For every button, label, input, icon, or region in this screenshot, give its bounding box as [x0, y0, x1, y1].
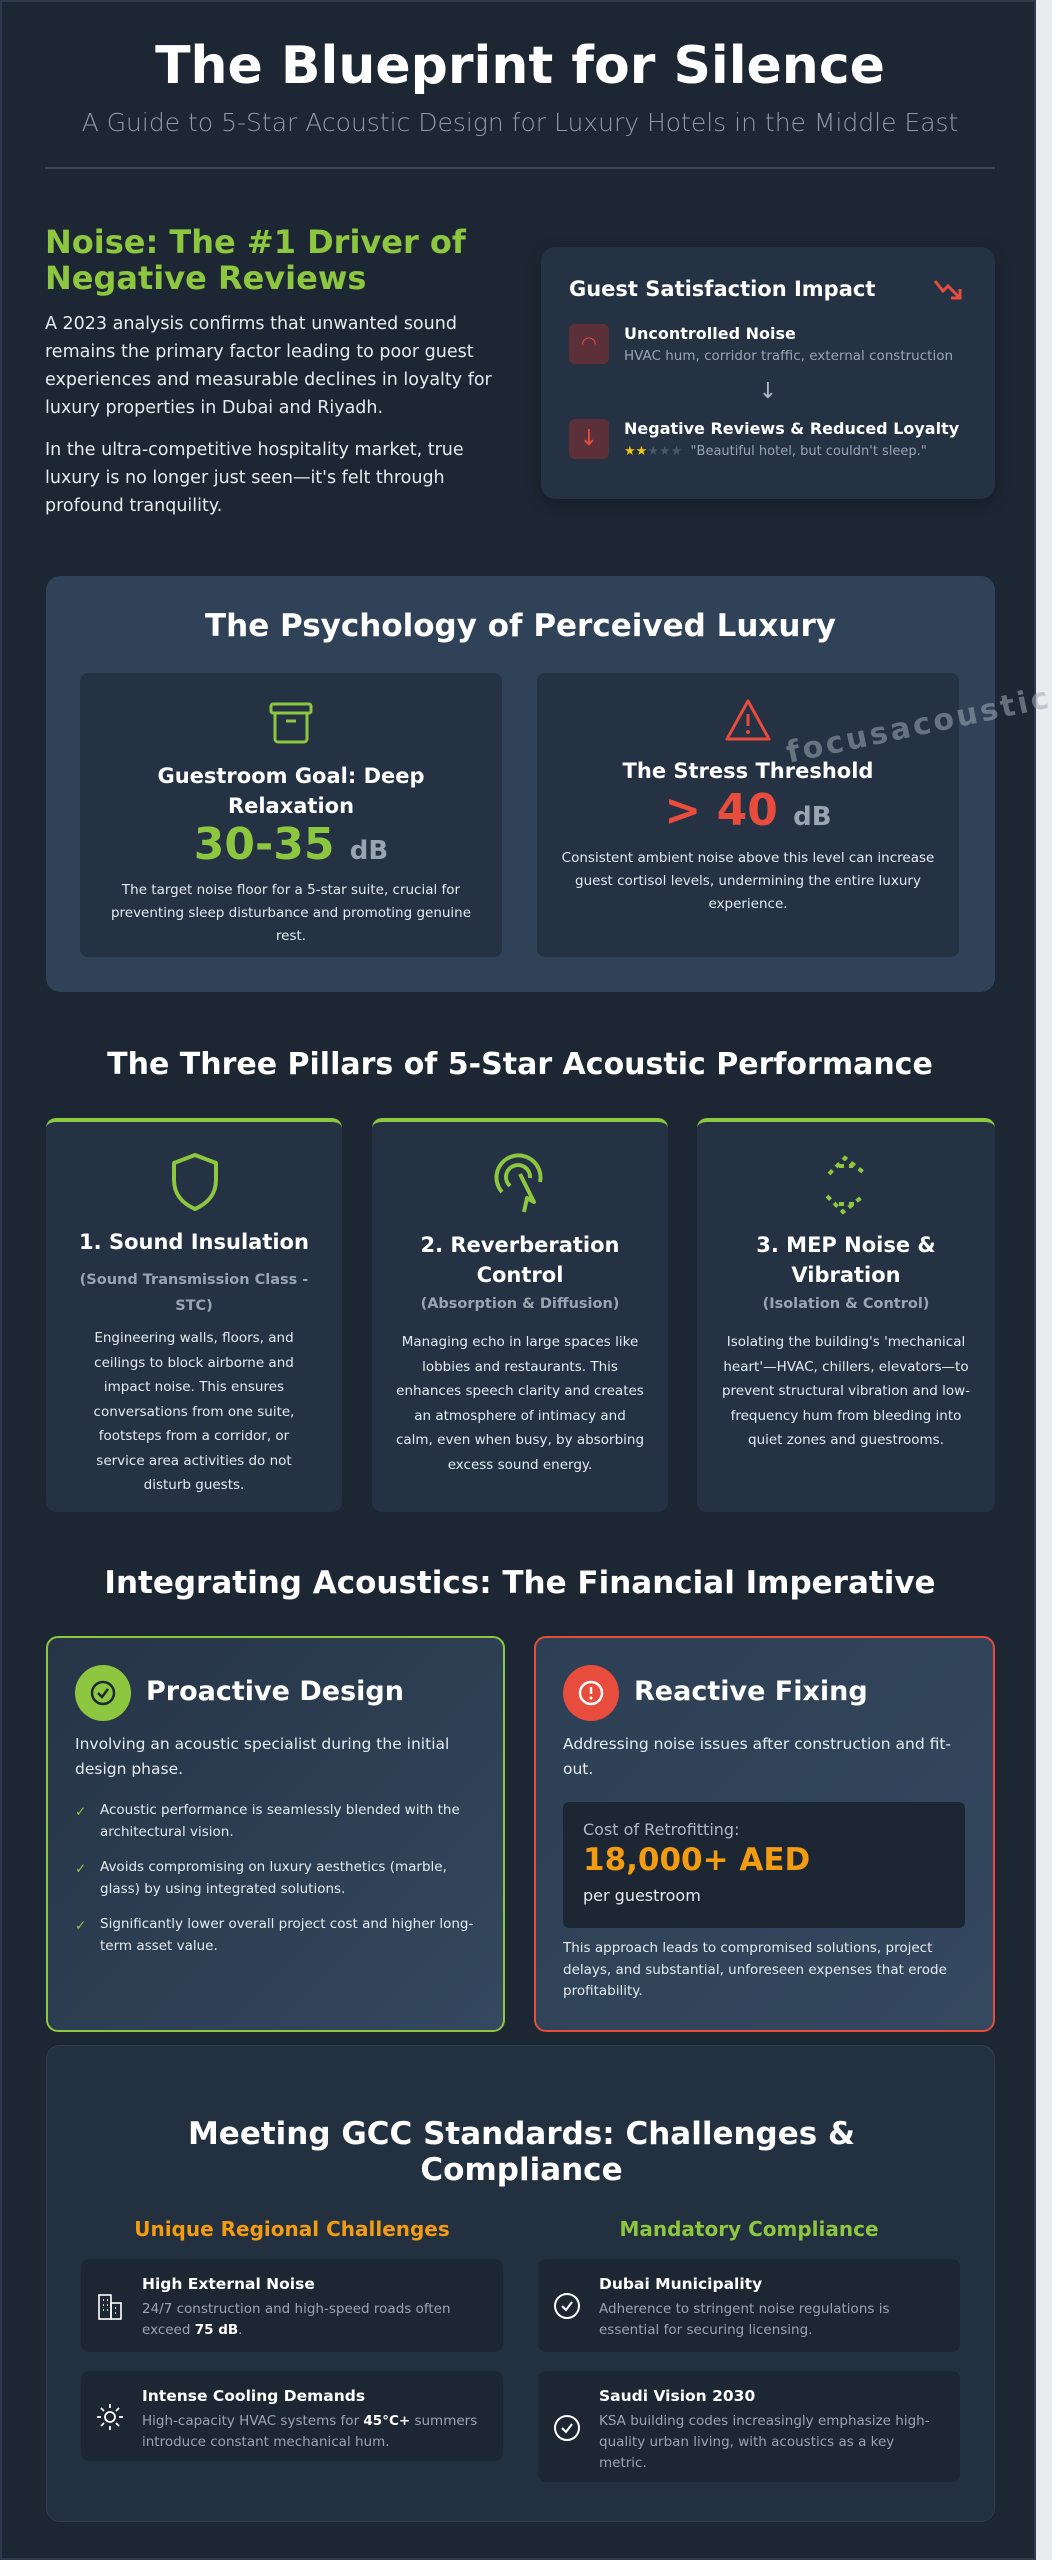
heading: financial imperative: Integrating Acoustics: The Financial Imperative	[104, 1565, 936, 1601]
card: reactive fixing: This approach leads to compromised solutions, project delays, and substantial, unforeseen expenses that erode profitability.	[563, 1940, 947, 1999]
subheading: challenges: Unique Regional Challenges	[134, 2217, 450, 2241]
cost box: 18,000+ AED	[583, 1842, 810, 1878]
pillar 1	[46, 1118, 342, 1512]
checklist	[75, 1802, 473, 1954]
icon: trend down	[934, 280, 962, 300]
card: stress threshold: Consistent ambient noise above this level can increase guest cortisol levels, undermining the entire luxury experience.	[562, 850, 934, 912]
icon: down arrow	[569, 419, 609, 459]
cost box: per guestroom	[583, 1886, 701, 1905]
cost box: Cost of Retrofitting:	[583, 1820, 739, 1839]
checklist: ✓	[75, 1861, 86, 1877]
item: uncontrolled noise: Uncontrolled Noise	[624, 324, 796, 343]
item: saudi vision: KSA building codes increasingly emphasize high-quality urban living, with acoustics as a key metric.	[599, 2413, 930, 2471]
item: uncontrolled noise	[569, 324, 953, 364]
subheading: compliance: Mandatory Compliance	[619, 2217, 879, 2241]
heading: The Psychology of Perceived Luxury	[205, 608, 836, 644]
subtitle: A Guide to 5-Star Acoustic Design for Luxury Hotels in the Middle East	[82, 108, 958, 137]
icon: shield	[172, 1153, 218, 1211]
icon: building	[98, 2294, 122, 2320]
item: negative reviews: Negative Reviews & Reduced Loyalty	[624, 419, 959, 438]
pillar 2	[372, 1118, 668, 1512]
stat: > 40 dB: > 40 dB	[664, 785, 832, 836]
title: The Blueprint for Silence	[155, 36, 885, 96]
checklist: Acoustic performance is seamlessly blended with the architectural vision.	[100, 1802, 460, 1840]
checklist: Avoids compromising on luxury aesthetics (marble, glass) by using integrated solutions.	[100, 1859, 447, 1896]
icon: vibration	[826, 1155, 864, 1215]
item: saudi vision	[538, 2371, 960, 2482]
icon: sun	[97, 2404, 123, 2430]
checklist: ✓	[75, 1804, 86, 1820]
pillar 2: 2. Reverberation Control	[420, 1233, 620, 1287]
item: cooling demands: High-capacity HVAC systems for 45°C+ summers introduce constant mechanical hum.	[142, 2413, 477, 2450]
pillar 1: Engineering walls, floors, and ceilings to block airborne and impact noise. This ensures conversations from one suite, footsteps from a corridor, or service area activities do not disturb guests.	[94, 1330, 294, 1493]
checklist: Significantly lower overall project cost and higher long-term asset value.	[100, 1916, 473, 1954]
icon: warning	[726, 699, 771, 740]
pillar 1: 1. Sound Insulation	[79, 1230, 309, 1254]
card: proactive design	[46, 1636, 505, 2032]
pillar 3: Isolating the building's 'mechanical heart'—HVAC, chillers, elevators—to prevent structural vibration and low-frequency hum from bleeding into quiet zones and guestrooms.	[722, 1334, 970, 1448]
item: cooling demands	[81, 2371, 503, 2461]
section: noise driver text	[45, 223, 492, 516]
pillar 3	[697, 1118, 995, 1512]
icon: box	[270, 702, 312, 744]
heading: three pillars: The Three Pillars of 5-Star Acoustic Performance	[107, 1047, 933, 1082]
heading: Compliance	[420, 2152, 623, 2188]
heading: Meeting GCC Standards: Challenges &	[188, 2116, 855, 2152]
card: reactive fixing	[534, 1636, 995, 2032]
item: dubai municipality: Dubai Municipality	[599, 2275, 762, 2293]
icon: pointer click	[494, 1153, 542, 1212]
icon: check circle	[554, 2293, 580, 2319]
pillar 3: 3. MEP Noise & Vibration	[756, 1233, 936, 1287]
item: uncontrolled noise: HVAC hum, corridor traffic, external construction	[624, 348, 953, 364]
panel: GCC standards	[46, 2045, 995, 2522]
pillar 2: Managing echo in large spaces like lobbies and restaurants. This enhances speech clarity and creates an atmosphere of intimacy and calm, even when busy, by absorbing excess sound energy.	[396, 1334, 644, 1472]
watermark: focusacoustic	[783, 680, 1052, 771]
cost box	[563, 1802, 965, 1928]
item: high external noise	[81, 2259, 503, 2352]
icon: green check circle	[75, 1665, 131, 1721]
icon: down arrow: ↓	[580, 426, 598, 451]
stat: 30-35 dB: 30-35 dB	[194, 819, 388, 870]
item: dubai municipality: Adherence to stringent noise regulations is essential for securing licensing.	[599, 2301, 889, 2338]
item: negative reviews	[569, 419, 959, 459]
card: guestroom goal: The target noise floor for a 5-star suite, crucial for preventing sleep disturbance and promoting genuine rest.	[111, 882, 471, 944]
item: dubai municipality	[538, 2259, 960, 2352]
icon: check circle	[554, 2415, 580, 2441]
paragraph 1: A 2023 analysis confirms that unwanted sound remains the primary factor leading to poor guest experiences and measurable declines in loyalty for luxury properties in Dubai and Riyadh.	[45, 314, 492, 418]
item: high external noise: 24/7 construction and high-speed roads often exceed 75 dB.	[142, 2301, 451, 2338]
icon: ear: ◠	[581, 333, 597, 354]
card: proactive design: Proactive Design	[146, 1676, 404, 1707]
card: proactive design: Involving an acoustic specialist during the initial design phase.	[75, 1735, 449, 1778]
pillar 1: (Sound Transmission Class - STC)	[80, 1272, 308, 1314]
item: high external noise: High External Noise	[142, 2275, 315, 2293]
paragraph 2: In the ultra-competitive hospitality market, true luxury is no longer just seen—it's felt through profound tranquility.	[45, 440, 464, 516]
arrow down: ↓	[759, 379, 777, 404]
heading	[188, 2116, 855, 2188]
icon: ear	[569, 324, 609, 364]
card: stress threshold: The Stress Threshold	[623, 759, 873, 783]
card: guestroom goal	[80, 673, 502, 957]
panel: psychology of perceived luxury	[46, 576, 995, 992]
card heading: Guest Satisfaction Impact	[569, 277, 875, 301]
item: cooling demands: Intense Cooling Demands	[142, 2387, 365, 2405]
item: negative reviews: ★★★★★ "Beautiful hotel, but couldn't sleep."	[624, 444, 927, 459]
heading: noise: Noise: The #1 Driver of Negative Reviews	[45, 223, 466, 297]
pillar 3: (Isolation & Control)	[763, 1296, 929, 1312]
card: reactive fixing: Addressing noise issues after construction and fit-out.	[563, 1735, 951, 1778]
item: saudi vision: Saudi Vision 2030	[599, 2387, 755, 2405]
icon: red alert circle	[563, 1665, 619, 1721]
card: guestroom goal: Guestroom Goal: Deep Relaxation	[157, 764, 425, 818]
card: reactive fixing: Reactive Fixing	[634, 1676, 868, 1707]
pillar 2: (Absorption & Diffusion)	[421, 1296, 619, 1312]
checklist: ✓	[75, 1918, 86, 1934]
card: stress threshold	[537, 673, 959, 957]
card: guest satisfaction impact	[541, 247, 995, 499]
